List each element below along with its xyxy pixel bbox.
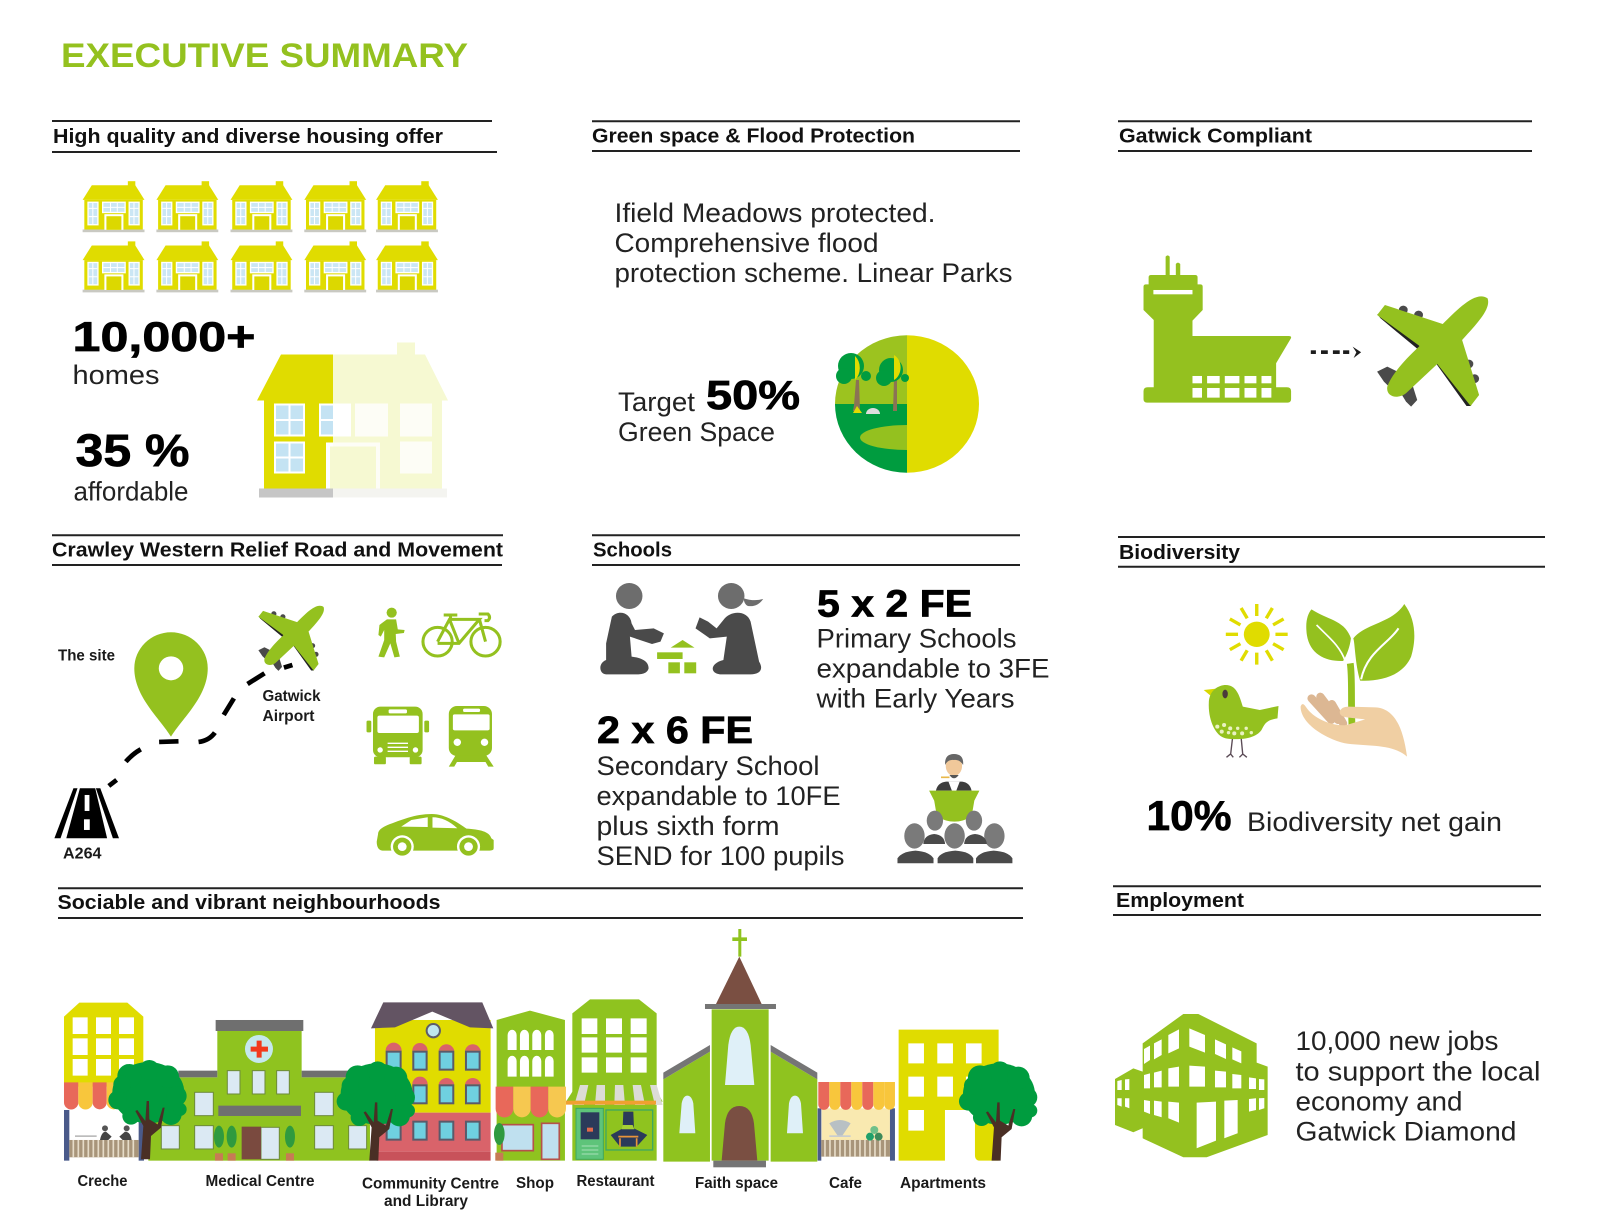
stat: homes: 10,000+ <box>72 313 256 360</box>
stat: secondary school: Secondary School <box>596 751 820 781</box>
text: new jobs <box>1296 1026 1540 1146</box>
icon: office building <box>1115 1014 1268 1157</box>
stat: homes: homes <box>72 360 160 390</box>
labels: building names: Shop <box>516 1175 554 1192</box>
panel: neighbourhoods <box>58 888 1037 1210</box>
icon: seedling in hand <box>1301 604 1414 757</box>
icon: control tower terminal <box>1144 255 1291 403</box>
icon: sun <box>1226 604 1288 665</box>
panel: relief road and movement <box>52 535 503 862</box>
labels: building names: Medical Centre <box>206 1173 315 1190</box>
stat: primary schools: with Early Years <box>815 684 1014 714</box>
icon: bird <box>1204 685 1278 757</box>
labels: building names: and Library <box>384 1193 468 1210</box>
heading: biodiversity: Biodiversity <box>1119 542 1241 564</box>
labels: building names: Restaurant <box>576 1173 654 1190</box>
panel: housing <box>52 121 497 506</box>
icon: large house 35 percent filled <box>257 342 448 498</box>
stat: secondary school: expandable to 10FE <box>596 781 840 811</box>
text: new jobs: to support the local <box>1296 1056 1540 1086</box>
heading: employment: Employment <box>1116 890 1244 912</box>
illustration: restaurant <box>566 999 663 1161</box>
arrow: tower to plane <box>1311 347 1361 358</box>
illustration: cafe <box>818 1082 895 1161</box>
panel: employment <box>1113 886 1541 1157</box>
heading: relief road: Crawley Western Relief Road and Movement <box>52 540 503 562</box>
icon: row of small houses <box>83 181 438 292</box>
text: flood protection: Comprehensive flood <box>614 228 878 258</box>
labels: building names: Cafe <box>829 1175 862 1192</box>
stat: biodiversity net gain: Biodiversity net gain <box>1247 807 1502 837</box>
stat: 50 percent green space: Target <box>618 387 696 417</box>
text: new jobs: economy and <box>1296 1086 1462 1116</box>
stat: secondary school: 2 x 6 FE <box>597 710 753 752</box>
illustration: trees by creche and community centre <box>108 1060 415 1161</box>
icon: children with blocks <box>600 583 763 674</box>
text: flood protection: protection scheme. Linear Parks <box>614 258 1012 288</box>
illustration: medical centre <box>148 1020 370 1161</box>
labels: building names: Creche <box>78 1173 128 1190</box>
chart: half circle park and half yellow <box>835 335 979 473</box>
stat: secondary school <box>596 710 844 871</box>
stat: secondary school: plus sixth form <box>596 811 780 841</box>
icon: speaker and audience <box>897 754 1012 863</box>
label: gatwick airport: Gatwick <box>262 688 321 705</box>
stat: affordable: affordable <box>74 476 188 506</box>
illustration: creche <box>64 1003 144 1161</box>
text: flood protection <box>614 198 1012 288</box>
icon: car <box>377 814 494 858</box>
stat: secondary school: SEND for 100 pupils <box>596 841 844 871</box>
label: gatwick airport <box>262 688 321 725</box>
stat: affordable <box>74 425 190 506</box>
illustration: community centre and library <box>371 1002 493 1161</box>
label: A264: A264 <box>63 846 102 862</box>
text: new jobs: 10,000 new jobs <box>1296 1026 1498 1056</box>
icon: road A264 <box>54 788 119 838</box>
icon: bicycle <box>423 614 500 656</box>
stat: 50 percent green space <box>618 372 800 447</box>
label: gatwick airport: Airport <box>262 708 314 725</box>
stat: 50 percent green space: Green Space <box>618 417 775 447</box>
labels: building names: Community Centre <box>362 1176 499 1192</box>
heading: green space: Green space & Flood Protection <box>592 126 915 148</box>
heading: housing: High quality and diverse housing offer <box>53 126 443 148</box>
illustration: faith space church <box>663 929 817 1167</box>
icon: plane <box>1377 296 1488 407</box>
label: the site: The site <box>58 648 115 664</box>
icon: bus <box>367 707 429 764</box>
illustration: shop <box>494 1011 566 1161</box>
icon: train <box>449 706 494 767</box>
heading: gatwick: Gatwick Compliant <box>1119 126 1312 148</box>
labels: building names <box>78 1173 986 1210</box>
text: new jobs: Gatwick Diamond <box>1296 1116 1516 1146</box>
stat: 50 percent green space: 50% <box>706 372 800 418</box>
labels: building names: Faith space <box>695 1175 778 1192</box>
stat: primary schools: 5 x 2 FE <box>817 584 972 626</box>
heading: schools: Schools <box>593 540 672 562</box>
route: dashed road line <box>109 665 292 786</box>
stat: primary schools: Primary Schools <box>816 624 1016 654</box>
text: flood protection: Ifield Meadows protected. <box>614 198 936 228</box>
stat: affordable: 35 % <box>76 425 190 476</box>
title: EXECUTIVE SUMMARY <box>61 37 468 75</box>
panel: green space <box>592 121 1020 473</box>
illustration: apartments <box>899 1030 1037 1161</box>
stat: primary schools <box>815 584 1050 714</box>
panel: schools <box>592 535 1050 871</box>
icon: walking person <box>378 608 405 657</box>
icon: plane small <box>258 606 324 671</box>
heading: neighbourhoods: Sociable and vibrant neighbourhoods <box>58 892 440 914</box>
stat: homes <box>72 313 256 390</box>
icon: location pin <box>134 632 208 737</box>
stat: biodiversity net gain: 10% <box>1146 792 1232 839</box>
stat: biodiversity net gain <box>1146 792 1502 839</box>
panel: gatwick compliant <box>1118 121 1532 407</box>
labels: building names: Apartments <box>900 1175 986 1192</box>
panel: biodiversity <box>1118 537 1545 839</box>
stat: primary schools: expandable to 3FE <box>816 654 1050 684</box>
